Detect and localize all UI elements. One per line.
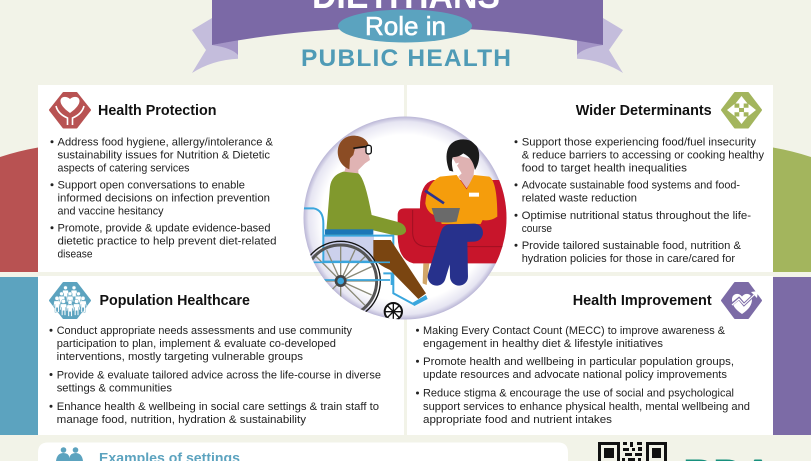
bullet list: dietetic practice to help prevent diet-related xyxy=(58,236,276,248)
bullet list: course xyxy=(522,223,552,235)
QR code xyxy=(598,442,667,461)
woman in orange xyxy=(425,139,497,277)
heading: Wider Determinants xyxy=(576,102,712,119)
legs xyxy=(437,233,474,277)
panel: population healthcare xyxy=(38,276,404,435)
bullet list: Support open conversations to enable xyxy=(58,180,245,192)
bullet list: aspects of catering services xyxy=(58,162,190,174)
bullet list: Reduce stigma & encourage the use of social and psychological xyxy=(423,388,734,400)
heading: Health Improvement xyxy=(573,292,712,309)
central illustration: dietitian with wheelchair user xyxy=(301,116,510,321)
bullet list xyxy=(514,137,764,265)
side band: blue xyxy=(0,277,38,435)
bullet list xyxy=(50,325,381,426)
title banner xyxy=(192,0,623,73)
panel: health improvement xyxy=(407,276,773,435)
side band: purple xyxy=(773,277,811,435)
icon: heart with rising arrow xyxy=(722,283,761,318)
bullet list: Promote health and wellbeing in particular population groups, xyxy=(423,356,734,368)
side band: green xyxy=(773,148,811,272)
bullet list: Optimise nutritional status throughout the life- xyxy=(522,210,751,222)
bullet list: Making Every Contact Count (MECC) to improve awareness & xyxy=(423,325,725,337)
bullet list: Advocate sustainable food systems and food- xyxy=(522,180,740,192)
role in ellipse xyxy=(338,10,472,42)
bullet list: Provide tailored sustainable food, nutrition & xyxy=(522,240,741,252)
icon: people in settings xyxy=(56,447,83,461)
settings panel xyxy=(38,442,568,461)
bullet list: & reduce barriers to accessing or cooking healthy xyxy=(522,150,764,162)
bullet list: informed decisions on infection prevention xyxy=(58,192,270,204)
bullet list: appropriate food and nutrient intakes xyxy=(423,414,612,426)
bullet list: disease xyxy=(58,248,92,260)
bullet list: food to target health inequalities xyxy=(522,163,687,175)
bullet list: engagement in healthy diet & lifestyle initiatives xyxy=(423,338,663,350)
bullet list: and vaccine hesitancy xyxy=(58,206,164,218)
bullet list: participation to plan, implement & evaluate co-developed xyxy=(57,338,336,350)
bullet list: hydration policies for those in care/cared for xyxy=(522,253,735,265)
bullet list: Provide & evaluate tailored advice across the life-course in diverse xyxy=(57,369,381,381)
panel: health protection xyxy=(38,85,404,272)
bullet list: sustainability issues for Nutrition & Dietetic xyxy=(58,150,270,162)
bullet list: manage food, nutrition, hydration & sustainability xyxy=(57,414,306,426)
side band: red xyxy=(0,148,38,272)
wheelchair xyxy=(301,208,428,321)
bullet list xyxy=(50,136,276,260)
bullet list: Enhance health & wellbeing in social care settings & train staff to xyxy=(57,401,379,413)
bullet list: interventions, mostly targeting vulnerable groups xyxy=(57,351,303,363)
bullet list: Support those experiencing food/fuel insecurity xyxy=(522,137,756,149)
bullet list: Conduct appropriate needs assessments and use community xyxy=(57,325,352,337)
role in ellipse: Role in xyxy=(365,11,446,41)
title words: public health: PUBLIC HEALTH xyxy=(301,45,511,72)
bullet list: settings & communities xyxy=(57,383,172,395)
icon: group of people xyxy=(50,283,90,318)
heading: Health Protection xyxy=(98,102,216,119)
bullet list: update resources and advocate national policy improvements xyxy=(423,369,727,381)
icon: hands holding heart xyxy=(50,93,90,128)
bullet list: Address food hygiene, allergy/intolerance & xyxy=(58,136,273,148)
bullet list: Promote, provide & update evidence-based xyxy=(58,222,270,234)
sofa xyxy=(398,180,510,285)
bullet list: related waste reduction xyxy=(522,193,637,205)
man in green xyxy=(326,136,406,235)
bullet list xyxy=(416,325,750,426)
bullet list: support services to enhance physical health, mental wellbeing and xyxy=(423,401,750,413)
icon: four arrows xyxy=(722,93,761,128)
panel: wider determinants xyxy=(407,85,773,272)
heading: Population Healthcare xyxy=(100,292,250,309)
